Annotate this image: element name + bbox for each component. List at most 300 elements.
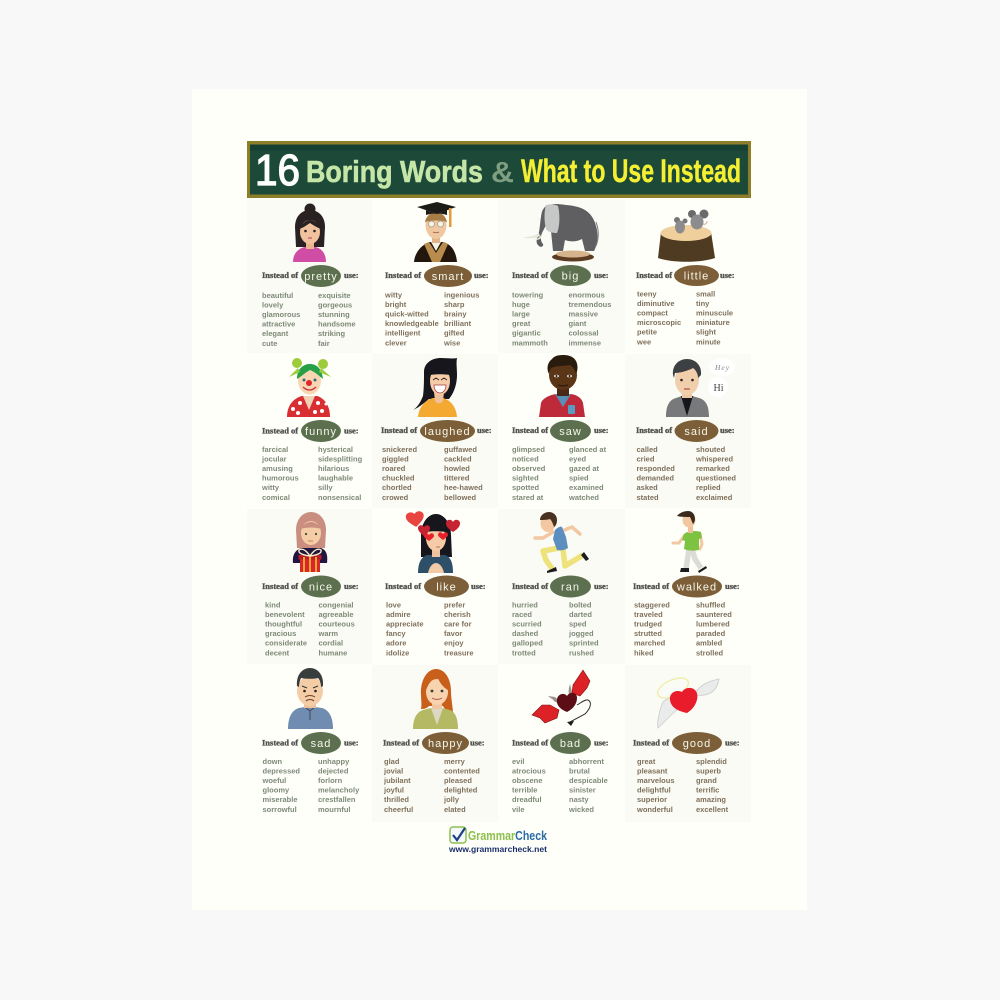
- heading: instead of walked: Instead of: [633, 581, 669, 591]
- word list: said: remarked: [696, 464, 730, 473]
- word list: said: responded: [636, 464, 675, 473]
- word list: good: great: [637, 757, 656, 766]
- panel: like: [372, 509, 498, 664]
- icon: man looking: [539, 355, 585, 417]
- icon: happy woman: [413, 669, 458, 729]
- panel: nice: [247, 509, 372, 664]
- heading: instead of pretty: Instead of: [262, 270, 298, 280]
- word list: ran: dashed: [512, 629, 539, 638]
- word list: little: minute: [696, 337, 721, 346]
- panel: said: [625, 354, 751, 508]
- heading: instead of funny: [262, 420, 359, 442]
- word list: said: [636, 445, 736, 502]
- word list: funny: sidesplitting: [318, 455, 363, 464]
- word list: said: questioned: [696, 474, 736, 483]
- word list: big: large: [512, 310, 530, 319]
- word list: walked: sauntered: [696, 610, 732, 619]
- icon: running man: [535, 512, 589, 573]
- word list: walked: hiked: [634, 648, 654, 657]
- word list: nice: congenial: [318, 600, 354, 610]
- word list: bad: nasty: [569, 795, 589, 804]
- word list: like: treasure: [444, 648, 474, 657]
- heading: instead of pretty: [262, 265, 359, 287]
- word list: big: towering: [512, 290, 544, 300]
- word list: like: cherish: [444, 610, 471, 619]
- word list: said: exclaimed: [696, 493, 733, 502]
- word list: saw: stared at: [512, 493, 544, 502]
- heading: instead of sad: [262, 732, 359, 754]
- heart: right dark: [446, 520, 460, 532]
- word list: nice: humane: [318, 648, 347, 657]
- word list: sad: down: [262, 757, 282, 766]
- word list: pretty: lovely: [262, 301, 284, 310]
- word list: said: cried: [636, 455, 655, 464]
- word list: funny: humorous: [262, 474, 299, 483]
- word list: pretty: gorgeous: [318, 301, 352, 310]
- word list: ran: jogged: [568, 629, 594, 638]
- word list: said: asked: [636, 483, 658, 492]
- word list: saw: observed: [512, 464, 546, 473]
- word list: sad: miserable: [262, 795, 298, 804]
- heart: left dark: [418, 525, 430, 536]
- word list: said: shouted: [696, 445, 726, 454]
- word list: little: wee: [636, 337, 651, 346]
- logo url: www.grammarcheck.net: [448, 844, 547, 854]
- word list: funny: laughable: [318, 474, 353, 483]
- word list: bad: brutal: [569, 767, 590, 776]
- word list: bad: abhorrent: [569, 757, 605, 766]
- word list: ran: bolted: [569, 600, 592, 610]
- panel: pretty: [247, 200, 372, 353]
- heading: instead of laughed: use:: [477, 425, 492, 435]
- heading: instead of laughed: Instead of: [381, 425, 417, 435]
- word list: smart: brainy: [444, 310, 467, 319]
- heading: instead of pretty: pretty: [304, 271, 338, 283]
- heading: instead of ran: use:: [594, 581, 609, 591]
- word list: bad: [512, 757, 608, 814]
- word list: little: tiny: [696, 299, 710, 308]
- word list: laughed: howled: [444, 464, 470, 473]
- word list: like: favor: [444, 629, 462, 638]
- word list: walked: lumbered: [696, 620, 730, 629]
- word list: nice: considerate: [265, 639, 307, 648]
- icon: elephant on stand: [523, 204, 598, 262]
- word list: nice: agreeable: [318, 610, 354, 619]
- word list: funny: comical: [262, 493, 290, 502]
- word list: laughed: chortled: [382, 483, 412, 492]
- heart: large light: [405, 511, 425, 528]
- word list: ran: sprinted: [569, 639, 599, 648]
- title: ampersand: &: [491, 157, 514, 189]
- word list: happy: jolly: [443, 795, 460, 804]
- word list: smart: clever: [385, 338, 407, 347]
- word list: walked: strutted: [634, 629, 662, 638]
- word list: ran: [512, 600, 599, 657]
- icon: clown: [287, 358, 331, 417]
- word list: sad: dejected: [318, 767, 349, 776]
- word list: funny: jocular: [261, 455, 287, 464]
- word list: good: wonderful: [636, 805, 673, 814]
- word list: happy: merry: [444, 757, 466, 766]
- word list: smart: intelligent: [385, 329, 421, 338]
- word list: walked: shuffled: [696, 600, 726, 610]
- word list: bad: despicable: [569, 776, 608, 785]
- heading: instead of good: [633, 732, 740, 754]
- heading: instead of big: big: [562, 270, 579, 282]
- word list: smart: knowledgeable: [385, 319, 439, 328]
- word list: nice: benevolent: [265, 610, 305, 619]
- word list: bad: sinister: [569, 786, 596, 795]
- word list: ran: darted: [569, 610, 592, 619]
- word list: pretty: exquisite: [318, 291, 351, 300]
- icon: graduate: [414, 202, 457, 262]
- word list: happy: elated: [444, 805, 466, 814]
- word list: good: superior: [637, 795, 667, 804]
- word list: good: grand: [696, 776, 717, 785]
- word list: nice: [265, 600, 355, 657]
- word list: big: huge: [512, 300, 530, 309]
- word list: laughed: bellowed: [444, 493, 477, 502]
- heading: instead of happy: use:: [470, 738, 485, 748]
- word list: saw: gazed at: [569, 464, 600, 473]
- speech bubble: Hi: Hi: [714, 383, 724, 394]
- word list: like: prefer: [444, 600, 465, 610]
- word list: good: splendid: [696, 757, 727, 766]
- heading: instead of like: like: [436, 582, 457, 594]
- word list: happy: joyful: [383, 786, 404, 795]
- icon: mice on tree stump: [658, 210, 715, 262]
- heading: instead of nice: Instead of: [262, 581, 298, 591]
- word list: sad: woeful: [262, 776, 286, 785]
- heading: instead of like: use:: [471, 581, 486, 591]
- word list: pretty: fair: [318, 339, 330, 348]
- word list: saw: eyed: [569, 455, 587, 464]
- word list: big: great: [512, 319, 531, 328]
- panel: funny: [247, 354, 372, 508]
- heading: instead of smart: smart: [432, 271, 464, 283]
- word list: big: mammoth: [512, 338, 548, 347]
- word list: laughed: [382, 445, 483, 502]
- word list: like: enjoy: [444, 639, 464, 648]
- heading: instead of like: Instead of: [385, 581, 421, 591]
- word list: smart: [384, 290, 479, 347]
- word list: saw: watched: [568, 493, 599, 502]
- heading: instead of saw: Instead of: [512, 425, 548, 435]
- title number 16: 16: [255, 146, 300, 195]
- title: What to Use Instead: What to Use Instead: [521, 153, 741, 189]
- word list: smart: witty: [384, 290, 403, 300]
- heading: instead of big: use:: [594, 270, 609, 280]
- word list: bad: wicked: [568, 805, 594, 814]
- panel: bad: [498, 665, 625, 822]
- word list: big: enormous: [568, 290, 605, 300]
- heading: instead of laughed: laughed: [424, 426, 471, 438]
- word list: pretty: handsome: [318, 320, 356, 329]
- word list: happy: contented: [444, 767, 480, 776]
- word list: like: love: [386, 600, 401, 610]
- word list: sad: melancholy: [318, 786, 360, 795]
- heading: instead of sad: sad: [311, 738, 331, 750]
- word list: happy: jovial: [383, 767, 403, 776]
- heading: instead of walked: walked: [676, 582, 717, 594]
- heading: instead of good: Instead of: [633, 738, 669, 748]
- icon: woman with hair bun: [293, 204, 326, 262]
- panel: big: [498, 200, 625, 353]
- icon: sad man: [288, 668, 333, 729]
- word list: bad: evil: [512, 757, 525, 766]
- word list: said: demanded: [636, 474, 674, 483]
- word list: nice: thoughtful: [265, 620, 302, 629]
- panel: saw: [498, 354, 625, 508]
- word list: ran: sped: [569, 620, 587, 629]
- heading: instead of said: Instead of: [636, 425, 672, 435]
- heading: instead of good: good: [683, 738, 711, 750]
- word list: little: slight: [696, 328, 717, 337]
- word list: little: compact: [637, 309, 668, 318]
- word list: funny: silly: [318, 483, 333, 492]
- heading: instead of big: Instead of: [512, 270, 548, 280]
- heading: instead of like: [385, 576, 486, 598]
- heading: instead of saw: use:: [594, 425, 609, 435]
- panel: ran: [498, 509, 625, 664]
- word list: big: tremendous: [568, 300, 611, 309]
- heading: instead of nice: use:: [344, 581, 359, 591]
- panel: laughed: [372, 354, 498, 508]
- word list: nice: warm: [318, 629, 338, 638]
- panel: sad: [247, 665, 372, 822]
- word list: nice: gracious: [265, 629, 296, 638]
- word list: saw: spotted: [512, 483, 540, 492]
- word list: pretty: attractive: [262, 320, 295, 329]
- word list: ran: rushed: [569, 648, 594, 657]
- word list: sad: gloomy: [262, 786, 290, 795]
- word list: happy: jubilant: [383, 776, 411, 785]
- word list: good: superb: [696, 767, 721, 776]
- word list: laughed: roared: [382, 464, 406, 473]
- word list: pretty: striking: [318, 329, 346, 338]
- word list: smart: brilliant: [444, 319, 472, 328]
- icon: laughing woman: [413, 358, 457, 417]
- heading: instead of smart: use:: [474, 270, 489, 280]
- word list: said: replied: [696, 483, 721, 492]
- word list: funny: [261, 445, 363, 502]
- heading: instead of nice: [262, 576, 359, 598]
- word list: smart: sharp: [444, 300, 465, 309]
- title: Boring Words: Boring Words: [306, 154, 483, 189]
- heading: instead of ran: Instead of: [512, 581, 548, 591]
- word list: saw: examined: [569, 483, 604, 492]
- word list: funny: amusing: [262, 464, 293, 473]
- word list: sad: crestfallen: [318, 795, 356, 804]
- word list: nice: cordial: [318, 639, 343, 648]
- word list: happy: thrilled: [384, 795, 409, 804]
- word list: little: minuscule: [696, 309, 733, 318]
- word list: nice: courteous: [318, 620, 355, 629]
- word list: laughed: tittered: [444, 474, 470, 483]
- word list: smart: bright: [385, 300, 407, 309]
- word list: pretty: glamorous: [262, 310, 300, 319]
- word list: big: [512, 290, 611, 347]
- word list: walked: [634, 600, 732, 657]
- heading: instead of good: use:: [725, 738, 740, 748]
- word list: good: terrific: [696, 786, 719, 795]
- word list: saw: sighted: [512, 474, 539, 483]
- word list: little: small: [696, 290, 715, 298]
- word list: like: admire: [386, 610, 411, 619]
- word list: bad: atrocious: [512, 767, 546, 776]
- icon: person speaking with speech bubbles: [666, 358, 735, 417]
- word list: laughed: cackled: [444, 455, 472, 464]
- icon: winged heart with halo: [655, 674, 719, 728]
- word list: saw: glanced at: [569, 445, 607, 454]
- heading: instead of sad: Instead of: [262, 738, 298, 748]
- word list: sad: forlorn: [318, 776, 343, 785]
- word list: good: delightful: [637, 786, 671, 795]
- word list: smart: ingenious: [444, 290, 479, 300]
- word list: walked: marched: [634, 639, 666, 648]
- word list: like: fancy: [386, 629, 406, 638]
- heading: instead of bad: [512, 732, 609, 754]
- word list: happy: delighted: [444, 786, 478, 795]
- panel: little: [625, 200, 751, 353]
- word list: walked: ambled: [696, 639, 723, 648]
- word list: big: immense: [568, 338, 601, 347]
- word list: sad: sorrowful: [262, 805, 297, 814]
- word list: good: amazing: [696, 795, 726, 804]
- heading: instead of saw: [512, 420, 609, 442]
- heading: instead of saw: saw: [559, 426, 582, 438]
- word list: laughed: chuckled: [382, 474, 415, 483]
- word list: saw: noticed: [512, 455, 539, 464]
- word list: big: giant: [568, 319, 587, 328]
- word list: smart: quick-witted: [385, 310, 429, 319]
- word list: pretty: beautiful: [262, 291, 293, 300]
- word list: ran: trotted: [512, 648, 536, 657]
- heading: instead of little: use:: [720, 270, 735, 280]
- word list: pretty: [262, 291, 356, 348]
- word list: little: diminutive: [637, 299, 675, 308]
- word list: like: care for: [444, 620, 472, 629]
- word list: saw: spied: [569, 474, 589, 483]
- word list: bad: obscene: [512, 776, 542, 785]
- word list: funny: hilarious: [318, 464, 349, 473]
- heading: instead of nice: nice: [309, 582, 333, 594]
- heading: instead of pretty: use:: [344, 270, 359, 280]
- word list: said: stated: [636, 493, 659, 502]
- title banner: [247, 141, 751, 198]
- heading: instead of bad: Instead of: [512, 738, 548, 748]
- heading: instead of laughed: [381, 420, 492, 442]
- heading: instead of sad: use:: [344, 738, 359, 748]
- heading: instead of smart: [385, 265, 489, 287]
- word list: laughed: hee-hawed: [444, 483, 483, 492]
- word list: laughed: giggled: [382, 455, 409, 464]
- word list: laughed: snickered: [382, 445, 417, 454]
- icon: woman holding gift: [293, 512, 327, 572]
- heading: instead of funny: use:: [344, 426, 359, 436]
- panel: smart: [372, 200, 498, 353]
- word list: sad: [262, 757, 360, 814]
- heading: instead of little: Instead of: [636, 270, 672, 280]
- word list: walked: staggered: [634, 600, 670, 610]
- heading: instead of ran: ran: [561, 582, 580, 594]
- heading: instead of funny: funny: [305, 426, 337, 438]
- heading: instead of little: little: [684, 270, 709, 282]
- word list: funny: hysterical: [318, 445, 353, 454]
- word list: sad: unhappy: [318, 757, 350, 766]
- heading: instead of funny: Instead of: [262, 426, 298, 436]
- word list: big: colossal: [568, 329, 599, 338]
- word list: ran: raced: [512, 610, 532, 619]
- word list: like: adore: [386, 639, 406, 648]
- word list: like: idolize: [386, 648, 409, 657]
- poster sheet: [192, 89, 807, 910]
- word list: nice: kind: [265, 600, 281, 610]
- heading: instead of big: [512, 265, 609, 286]
- word list: walked: trudged: [634, 620, 662, 629]
- heading: instead of ran: [512, 576, 609, 598]
- word list: pretty: elegant: [262, 329, 289, 338]
- word list: happy: cheerful: [384, 805, 413, 814]
- word list: ran: scurried: [512, 620, 542, 629]
- heading: instead of walked: use:: [725, 581, 740, 591]
- heading: instead of bad: use:: [594, 738, 609, 748]
- word list: nice: decent: [265, 648, 290, 657]
- word list: little: microscopic: [637, 318, 681, 327]
- word list: little: miniature: [696, 318, 730, 327]
- word list: saw: glimpsed: [512, 445, 545, 454]
- panel: happy: [372, 665, 498, 822]
- word list: bad: terrible: [512, 786, 537, 795]
- icon: walking man: [673, 511, 707, 573]
- word list: pretty: stunning: [318, 310, 350, 319]
- word list: saw: [512, 445, 607, 502]
- word list: said: called: [636, 445, 658, 454]
- word list: walked: paraded: [696, 629, 726, 638]
- heading: instead of little: [636, 265, 735, 286]
- word list: little: petite: [637, 328, 657, 337]
- word list: ran: hurried: [512, 600, 538, 610]
- heading: instead of said: said: [684, 426, 709, 438]
- word list: good: pleasant: [637, 767, 668, 776]
- word list: bad: dreadful: [512, 795, 542, 804]
- word list: ran: galloped: [512, 639, 543, 648]
- word list: sad: depressed: [262, 767, 300, 776]
- word list: funny: nonsensical: [318, 493, 361, 502]
- word list: little: teeny: [637, 290, 657, 298]
- word list: happy: glad: [384, 757, 400, 766]
- icon: check box: [450, 827, 466, 843]
- word list: walked: strolled: [696, 648, 724, 657]
- word list: laughed: guffawed: [444, 445, 477, 454]
- heading: instead of said: [636, 420, 735, 442]
- word list: big: gigantic: [512, 329, 541, 338]
- heading: instead of smart: Instead of: [385, 270, 421, 280]
- word list: little: [636, 290, 733, 346]
- word list: good: [636, 757, 729, 814]
- speech bubble: Hey: Hey: [714, 363, 730, 372]
- word list: good: excellent: [696, 805, 729, 814]
- panel: good: [625, 665, 751, 822]
- heading: instead of happy: happy: [428, 738, 463, 750]
- heading: instead of bad: bad: [560, 738, 581, 750]
- word list: pretty: cute: [262, 339, 277, 348]
- word list: like: appreciate: [386, 620, 424, 629]
- icon: woman with heart eyes: [405, 511, 460, 573]
- word list: big: massive: [568, 310, 598, 319]
- word list: happy: [383, 757, 480, 814]
- panel: walked: [625, 509, 751, 664]
